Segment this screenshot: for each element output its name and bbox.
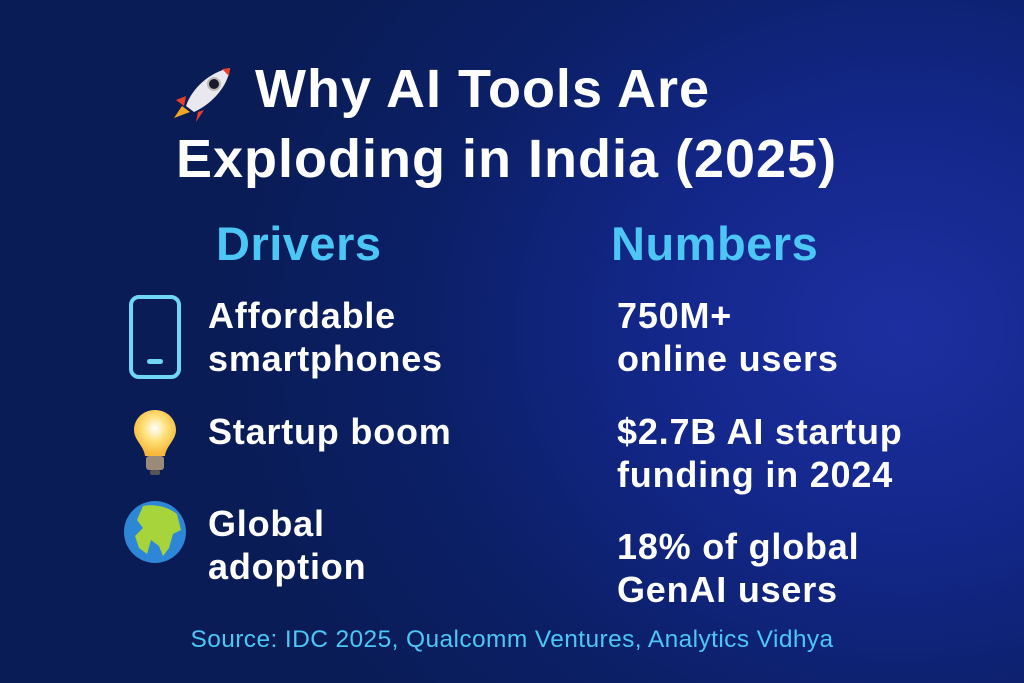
number: GenAI users: 18% of global (617, 526, 859, 567)
number: GenAI users: GenAI users (617, 569, 838, 610)
number: funding: $2.7B AI startup (617, 411, 903, 452)
driver: startup boom: Startup boom (208, 411, 452, 452)
source: Source: IDC 2025, Qualcomm Ventures, Analytics Vidhya (190, 626, 834, 653)
icon: globe (124, 501, 186, 563)
icon: rocket (174, 68, 230, 122)
heading: Numbers: Numbers (611, 217, 818, 270)
number: funding (617, 411, 903, 495)
driver: global adoption (208, 503, 366, 587)
driver: global adoption: Global (208, 503, 325, 544)
driver: affordable smartphones: Affordable (208, 295, 396, 336)
number: online users: 750M+ (617, 295, 732, 336)
heading: Drivers: Drivers (216, 217, 382, 270)
driver: affordable smartphones (208, 295, 443, 379)
title (174, 59, 837, 189)
number: funding: funding in 2024 (617, 454, 893, 495)
icon: smartphone (129, 295, 181, 379)
icon: light bulb (134, 410, 176, 475)
number: online users: online users (617, 338, 839, 379)
title: Exploding in India (2025) (176, 129, 837, 189)
number: online users (617, 295, 839, 379)
title: Why AI Tools Are (255, 59, 710, 119)
driver: affordable smartphones: smartphones (208, 338, 443, 379)
driver: global adoption: adoption (208, 546, 366, 587)
number: GenAI users (617, 526, 859, 610)
